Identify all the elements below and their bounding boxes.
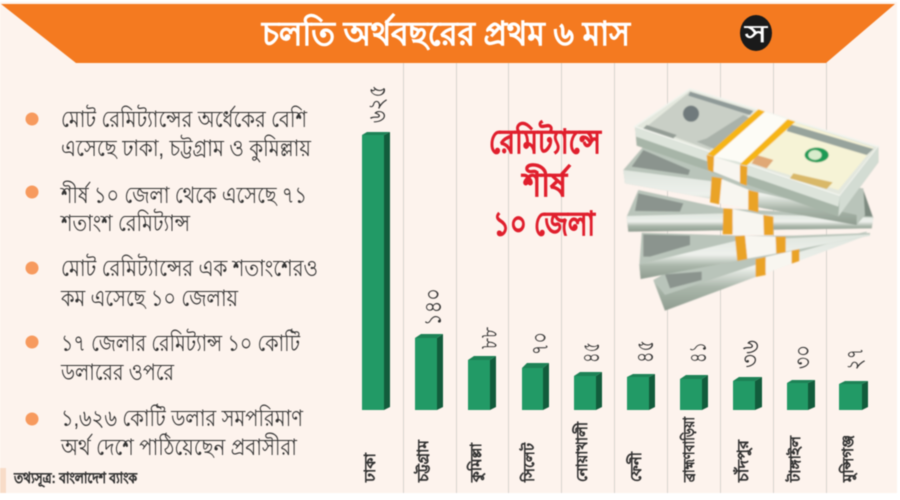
bar: Chandpur: চাঁদপুর — [733, 439, 752, 483]
bill stack 5 — [653, 232, 867, 311]
bar: Tangail: ৩০ — [790, 345, 817, 369]
chart heading: রেমিট্যান্সে — [489, 120, 602, 160]
bar: Dhaka — [362, 85, 391, 483]
bullet 2 — [26, 181, 307, 236]
bullet 3 — [26, 254, 318, 311]
bar: Brahmanbaria — [679, 342, 712, 483]
bill stack 1 — [635, 89, 878, 217]
bullet 5: অর্থ দেশে পাঠিয়েছেন প্রবাসীরা — [60, 433, 297, 460]
bullet 4 — [26, 329, 300, 385]
bullet 1 — [26, 105, 311, 162]
bar: Munshiganj: মুন্সিগঞ্জ — [838, 435, 857, 483]
bar: Dhaka: ৬২৫ — [364, 85, 391, 123]
bar: Cumilla: কুমিল্লা — [466, 442, 486, 483]
bar: Noakhali: নোয়াখালী — [572, 421, 591, 482]
bar: Chattogram — [413, 288, 447, 483]
bullet 3: কম এসেছে ১০ জেলায় — [60, 285, 238, 311]
bar: Munshiganj — [838, 348, 869, 483]
bullet 3: মোট রেমিট্যান্সের এক শতাংশেরও — [61, 254, 318, 281]
bullet 2: শতাংশ রেমিট্যান্স — [60, 209, 191, 236]
bullet 5 — [26, 404, 304, 460]
bar: Tangail: টাঙ্গাইল — [785, 435, 804, 483]
bill stack 4 — [639, 233, 870, 279]
bar: Feni — [626, 340, 659, 482]
bullet 4: ডলারের ওপরে — [60, 359, 174, 385]
bill stack 3 — [627, 190, 873, 235]
bar: Munshiganj: ২৭ — [842, 348, 869, 370]
bar: Sylhet — [519, 332, 554, 483]
bar: Chandpur — [733, 340, 764, 483]
bullet 2: শীর্ষ ১০ জেলা থেকে এসেছে ৭১ — [60, 181, 307, 208]
chart heading — [489, 120, 602, 242]
bar: Dhaka: ঢাকা — [362, 452, 379, 483]
bar: Chattogram: চট্টগ্রাম — [413, 439, 432, 483]
bullet 1: এসেছে ঢাকা, চট্টগ্রাম ও কুমিল্লায় — [61, 134, 311, 162]
bar chart — [362, 85, 869, 483]
key points list — [26, 105, 318, 460]
bullet 1: মোট রেমিট্যান্সের অর্ধেকের বেশি — [61, 105, 307, 132]
bar: Chattogram: ১৪০ — [420, 288, 447, 326]
title banner — [1, 4, 895, 63]
bar: Cumilla: ৮৮ — [476, 327, 503, 349]
logo — [740, 15, 772, 51]
bar: Brahmanbaria: ৪১ — [685, 342, 712, 363]
bar: Feni: ফেনী — [626, 451, 645, 482]
bullet 5: ১,৬২৬ কোটি ডলার সমপরিমাণ — [61, 404, 304, 431]
bar: Chandpur: ৩৬ — [737, 340, 764, 368]
bar: Cumilla — [466, 327, 503, 483]
logo: স — [744, 21, 769, 48]
icon: stacks of dollar bills — [623, 89, 878, 311]
bar: Feni: ৪৫ — [632, 340, 659, 363]
bar: Noakhali — [572, 342, 605, 482]
title: চলতি অর্থবছরের প্রথম ৬ মাস — [261, 13, 631, 52]
bar: Tangail — [785, 345, 817, 483]
bar: Noakhali: ৪৫ — [578, 342, 605, 363]
bullet 4: ১৭ জেলার রেমিট্যান্স ১০ কোটি — [61, 329, 300, 356]
bill stack 2 — [623, 147, 865, 225]
chart heading: শীর্ষ — [521, 163, 571, 203]
bar: Sylhet: ৭০ — [527, 332, 554, 355]
bar: Brahmanbaria: ব্রাহ্মণবাড়িয়া — [679, 416, 698, 483]
source note: তথ্যসূত্র: বাংলাদেশ ব্যাংক — [13, 470, 137, 489]
bar: Sylhet: সিলেট — [519, 442, 538, 483]
chart heading: ১০ জেলা — [493, 205, 596, 242]
